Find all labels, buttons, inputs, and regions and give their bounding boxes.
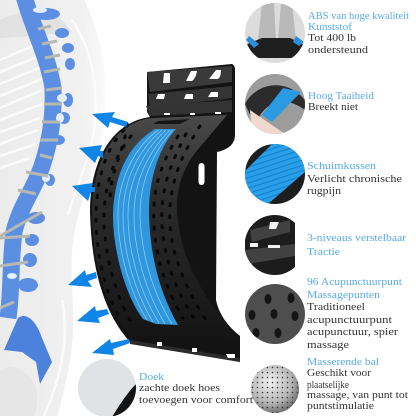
bottom tabs	[130, 340, 240, 362]
stretcher device	[90, 64, 240, 362]
photo: cloth	[78, 359, 136, 416]
description line 4: massage	[307, 339, 349, 351]
description line 2: ondersteund	[308, 44, 369, 56]
heading: Hoog Taaiheid	[308, 90, 374, 102]
heading line 2: Massagepunten	[307, 289, 381, 301]
adjustable top notches	[146, 66, 232, 116]
photo: blue foam close-up	[245, 144, 305, 204]
heading: Masserende bal	[307, 356, 379, 368]
blue spinal column	[8, 0, 53, 318]
description line 4: puntstimulatie	[307, 400, 374, 412]
vertebra highlights	[7, 7, 67, 279]
heading line 2: Kunststof	[308, 21, 352, 33]
black frame silhouette	[90, 64, 240, 362]
translucent body silhouette	[0, 0, 106, 416]
description line 3: massage, van punt tot	[307, 389, 408, 401]
perforated curved face	[92, 115, 240, 343]
arrow 2	[79, 145, 103, 163]
feature: foam cushion	[245, 144, 402, 204]
description line 2: rugpijn	[307, 185, 342, 197]
arrow 1	[92, 112, 128, 128]
icon: spiked ball	[251, 365, 299, 413]
feature: 96 acupuncture points	[245, 276, 402, 351]
description: zachte doek hoes	[139, 382, 220, 394]
arrow 4	[68, 270, 97, 287]
description line 2: toevoegen voor comfort	[139, 394, 253, 406]
heading: ABS van hoge kwaliteit	[308, 10, 409, 22]
heading: Doek	[139, 371, 165, 383]
heading: Schuimkussen	[307, 160, 377, 172]
top recess	[153, 119, 190, 124]
arrow 5	[77, 306, 109, 323]
photo: bending device	[245, 74, 305, 134]
description: Tot 400 lb	[308, 32, 357, 44]
description: Breekt niet	[308, 101, 358, 113]
skeleton torso with blue spine	[0, 0, 106, 416]
feature: three-level traction	[245, 215, 406, 275]
pelvis bones	[0, 367, 37, 416]
arrow 3	[72, 183, 95, 201]
arrow 6	[92, 339, 130, 355]
photo: notches	[245, 215, 295, 275]
photo: seated user	[245, 3, 305, 63]
description line 3: acupunctuur, spier	[307, 326, 398, 338]
blue sacrum	[4, 316, 52, 384]
strip ridges	[118, 130, 173, 324]
feature: cloth cover	[78, 359, 253, 416]
description: Geschikt voor	[307, 367, 371, 379]
feature: ABS plastic	[245, 3, 409, 63]
vertebra lobes	[18, 8, 75, 292]
description line 2: acupunctuurpunt	[307, 314, 392, 326]
photo: nodules	[245, 284, 305, 344]
arrows pointing to the spine	[68, 112, 130, 355]
translucent rib lines	[0, 20, 96, 416]
description line 2: plaatselijke	[307, 379, 349, 391]
massage dots right of strip	[154, 126, 206, 320]
blue foam strip	[113, 129, 178, 325]
shoulder blade shading	[0, 11, 72, 38]
feature: high toughness	[245, 74, 374, 134]
heading line 2: Tractie	[307, 246, 340, 258]
heading: 3-niveaus verstelbaar	[307, 232, 406, 244]
description: Traditioneel	[307, 301, 365, 313]
heading: 96 Acupunctuurpunt	[307, 276, 402, 288]
feature: massage ball	[251, 356, 408, 413]
side slot	[198, 163, 204, 185]
description: Verlicht chronische	[307, 173, 402, 185]
massage dots left of strip	[96, 124, 131, 322]
grey spinal discs	[0, 26, 62, 308]
